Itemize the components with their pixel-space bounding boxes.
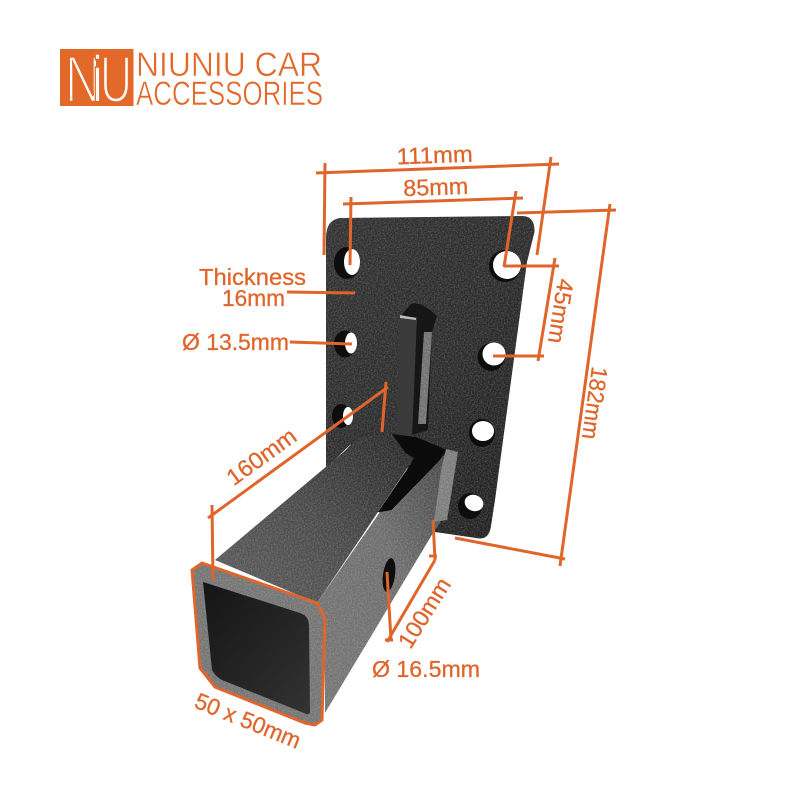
dimension: 45mm (493, 258, 579, 361)
dimension: 45mm: 45mm (543, 277, 579, 345)
dimension: 100mm (385, 520, 456, 653)
logo mark (60, 42, 134, 116)
logo text line 1: NIUNIU CAR (136, 46, 322, 84)
tube opening (203, 582, 310, 714)
gusset and weld (396, 303, 437, 440)
logo (60, 42, 323, 116)
label: thickness: Thickness (199, 264, 306, 290)
label: tube size: 50 x 50mm (191, 688, 305, 754)
label: thickness: 16mm (222, 285, 285, 311)
tube front rim (192, 563, 325, 725)
side hole (381, 557, 397, 593)
dark gap behind tube (378, 434, 447, 514)
dimension: 111mm (316, 141, 559, 255)
logo mark: i (92, 42, 103, 116)
mounting plate (326, 216, 535, 538)
label: tube hole diameter: Ø 16.5mm (372, 656, 480, 682)
dimension: 100mm: 100mm (393, 573, 456, 653)
tube top face (215, 435, 414, 603)
dimension: 160mm: 160mm (221, 422, 301, 491)
dimension: 85mm: 85mm (403, 173, 469, 201)
dimension: 85mm (343, 173, 523, 267)
logo text line 2: ACCESSORIES (136, 75, 323, 113)
label: plate hole diameter: Ø 13.5mm (182, 329, 289, 355)
collar weld (434, 449, 458, 522)
dimension: 111mm: 111mm (396, 141, 473, 169)
front face outline (192, 563, 325, 725)
dimension: 182mm (455, 204, 616, 566)
logo mark: N (65, 42, 101, 116)
tube side face (317, 452, 447, 713)
dimension: 182mm: 182mm (577, 365, 613, 441)
label: thickness (199, 264, 355, 311)
plate holes (332, 247, 521, 519)
dimension: 160mm (208, 382, 388, 580)
logo mark: U (100, 42, 132, 116)
hitch receiver bracket (192, 216, 535, 725)
